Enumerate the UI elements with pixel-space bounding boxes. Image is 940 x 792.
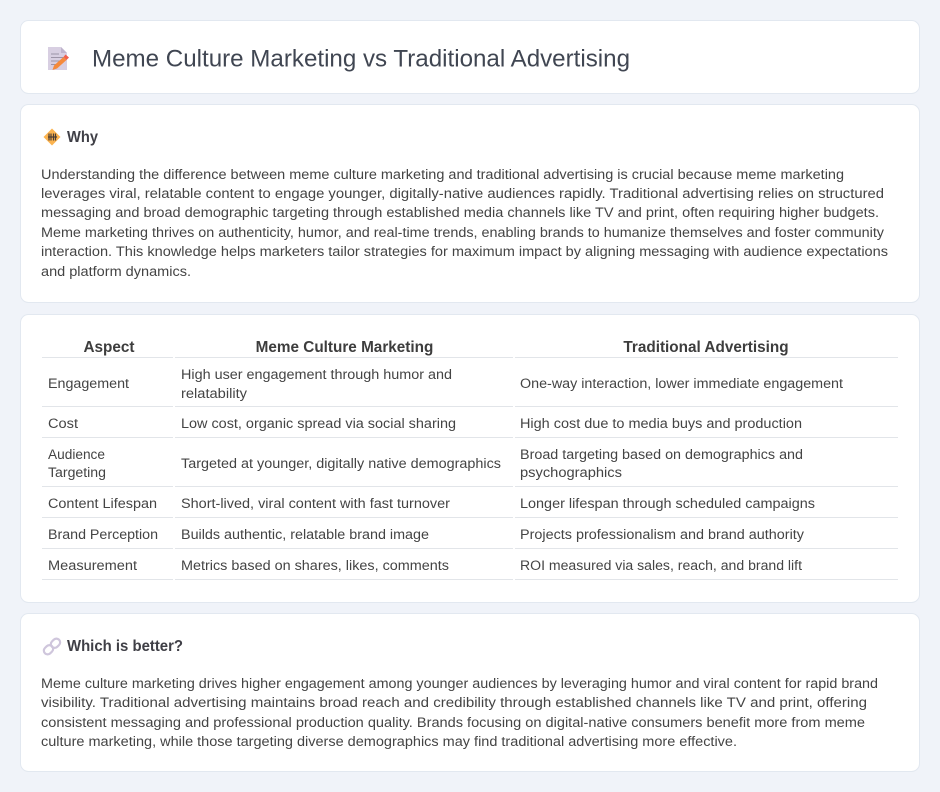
- row: measurement: Measurement: [48, 558, 137, 574]
- row: content lifespan: Longer lifespan through scheduled campaigns: [520, 496, 815, 512]
- row: engagement: relatability: [181, 386, 248, 402]
- title: Meme Culture Marketing vs Traditional Advertising: [92, 46, 630, 72]
- row: engagement: High user engagement through humor and: [181, 367, 452, 383]
- table header: Meme Culture Marketing: [256, 339, 433, 356]
- table header: Aspect: [83, 339, 135, 356]
- row: audience targeting: Audience: [48, 447, 105, 463]
- row: audience targeting: psychographics: [520, 465, 622, 481]
- icon: link: [42, 637, 62, 656]
- text block: which is better: Meme culture marketing drives higher engagement among younger audiences by leveraging humor and viral content for rapid brand: [41, 676, 878, 692]
- text block: which is better: visibility. Traditional advertising maintains broad reach and credibility through established channels like TV and print, offering: [41, 695, 867, 711]
- row: content lifespan: Short-lived, viral content with fast turnover: [181, 496, 450, 512]
- text block: which is better: culture marketing, while those targeting diverse demographics may find traditional advertising more effective.: [41, 734, 737, 750]
- text block: why: leverages viral, relatable content to engage younger, digitally-native audiences rapidly. Traditional advertising relies on structured: [41, 186, 884, 202]
- heading: why: Why: [67, 129, 98, 146]
- table header: Traditional Advertising: [623, 339, 789, 356]
- panel: header: [20, 20, 920, 94]
- row: audience targeting: Targeted at younger, digitally native demographics: [181, 456, 501, 472]
- panel: why: [20, 104, 920, 302]
- row: brand perception: Brand Perception: [48, 527, 158, 543]
- table header: [83, 339, 789, 356]
- row: content lifespan: Content Lifespan: [48, 496, 157, 512]
- icon: road sign: [44, 128, 60, 146]
- row: cost: Cost: [48, 416, 78, 432]
- row: audience targeting: [48, 447, 803, 481]
- row: cost: [48, 416, 802, 432]
- text block: why: and platform dynamics.: [41, 264, 191, 280]
- row: engagement: One-way interaction, lower immediate engagement: [520, 376, 843, 392]
- text block: why: interaction. This knowledge helps marketers tailor strategies for maximum impact by aligning messaging with audience expectations: [41, 244, 888, 260]
- row: brand perception: [48, 527, 805, 543]
- row: measurement: [48, 558, 802, 574]
- text block: why: [41, 167, 888, 280]
- panel: which is better: [20, 614, 920, 772]
- row: brand perception: Builds authentic, relatable brand image: [181, 527, 429, 543]
- panel: comparison table: [20, 314, 920, 602]
- row: measurement: Metrics based on shares, likes, comments: [181, 558, 449, 574]
- row: engagement: [48, 367, 843, 402]
- text block: why: messaging and broad demographic targeting through established media channels like TV and print, often requiring higher budgets.: [41, 205, 879, 221]
- row: brand perception: Projects professionalism and brand authority: [520, 527, 805, 543]
- row: engagement: Engagement: [48, 376, 129, 392]
- row: cost: Low cost, organic spread via social sharing: [181, 416, 456, 432]
- row: audience targeting: Broad targeting based on demographics and: [520, 447, 803, 463]
- text block: why: Meme marketing thrives on authenticity, humor, and real-time trends, enabling brands to humanize themselves and foster community: [41, 225, 885, 241]
- text block: why: Understanding the difference between meme culture marketing and traditional advertising is crucial because meme marketing: [41, 167, 844, 183]
- row: cost: High cost due to media buys and production: [520, 416, 802, 432]
- text block: which is better: consistent messaging and professional production quality. Brands focusing on digital-native consumers benefit more from meme: [41, 715, 865, 731]
- row: measurement: ROI measured via sales, reach, and brand lift: [520, 558, 802, 574]
- row: audience targeting: Targeting: [48, 465, 106, 481]
- icon: document with pencil: [48, 47, 69, 70]
- row: content lifespan: [48, 496, 815, 512]
- heading: which is better: Which is better?: [67, 638, 183, 655]
- text block: which is better: [41, 676, 878, 750]
